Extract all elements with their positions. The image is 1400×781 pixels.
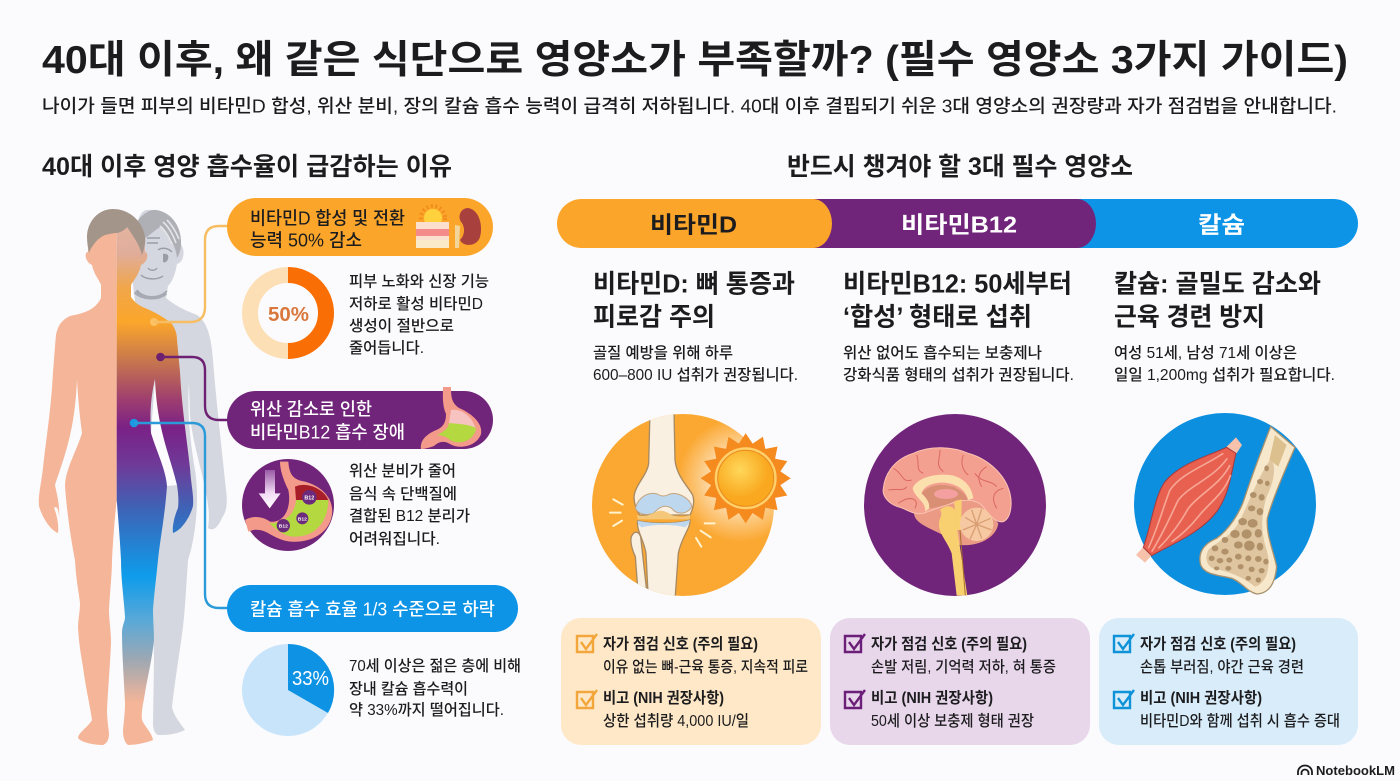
heading: 칼슘: 골밀도 감소와 [1114, 270, 1321, 298]
description: 음식 속 단백질에 [349, 485, 457, 503]
front figure right half with gradient [117, 225, 193, 745]
note text: 상한 섭취량 4,000 IU/일 [603, 712, 749, 730]
muscle [1136, 437, 1242, 563]
tab label D: 비타민D [650, 212, 737, 238]
body text: 강화식품 형태의 섭취가 권장됩니다. [843, 366, 1074, 384]
tab label calcium: 칼슘 [1198, 212, 1245, 238]
icon: stomach circle [242, 459, 334, 551]
pill: vitamin D [227, 198, 493, 256]
pie chart 33%: 33% [292, 668, 329, 690]
check text: 손발 저림, 기억력 저하, 혀 통증 [871, 658, 1056, 676]
check box panel [561, 618, 821, 745]
knee spark lines [610, 499, 715, 547]
description: 70세 이상은 젊은 층에 비해 [349, 657, 521, 675]
pill: B12 [227, 391, 493, 449]
B12 particles: B12 [298, 516, 307, 522]
note text: 50세 이상 보충제 형태 권장 [871, 712, 1034, 730]
description: 피부 노화와 신장 기능 [349, 272, 489, 290]
check text: 손톱 부러짐, 야간 근육 경련 [1140, 658, 1304, 676]
icon: check [1114, 690, 1134, 708]
icon: check [577, 690, 597, 708]
pill: calcium [227, 585, 518, 632]
icon: check [1114, 634, 1134, 652]
tab: calcium [1000, 199, 1358, 248]
donut chart 50% [250, 275, 326, 351]
panel: vitamin D cause [227, 198, 493, 357]
heading: 피로감 주의 [593, 304, 715, 332]
pie chart 33% [242, 644, 334, 736]
bone [1200, 427, 1295, 594]
front figure left half [39, 225, 117, 745]
older figure in grey [132, 210, 227, 735]
right heading: 반드시 챙겨야 할 3대 필수 영양소 [787, 153, 1133, 181]
description: 저하로 활성 비타민D [349, 295, 483, 313]
hair [87, 209, 145, 255]
connector dots [130, 318, 165, 427]
B12 particles: B12 [304, 495, 314, 501]
heading: 비타민D: 뼈 통증과 [593, 270, 795, 298]
title: 40대 이후, 왜 같은 식단으로 영양소가 부족할까? (필수 영양소 3가지 가이드) [42, 39, 1348, 82]
note title: 비고 (NIH 권장사항) [1140, 689, 1262, 707]
description: 결합된 B12 분리가 [349, 507, 470, 525]
tab: vitamin D [557, 199, 832, 248]
heading: ‘합성’ 형태로 섭취 [843, 304, 1032, 332]
panel: calcium column [1099, 270, 1358, 745]
watermark: NotebookLM: NotebookLM [1316, 764, 1395, 778]
icon: check [577, 634, 597, 652]
icon: stomach [421, 387, 481, 449]
description: 약 33%까지 떨어집니다. [349, 701, 504, 719]
icon: check [845, 634, 865, 652]
check box panel [1099, 618, 1358, 745]
illustration: muscle and bone [1134, 413, 1316, 595]
heading: 비타민B12: 50세부터 [843, 270, 1072, 298]
pill text: 비타민D 합성 및 전환 [250, 208, 405, 228]
icon: sun [700, 433, 791, 524]
pill text: 비타민B12 흡수 장애 [250, 422, 405, 442]
icon: check [845, 690, 865, 708]
left heading: 40대 이후 영양 흡수율이 급감하는 이유 [42, 153, 452, 181]
illustration: brain [864, 414, 1046, 596]
check text: 이유 없는 뼈-근육 통증, 지속적 피로 [603, 658, 808, 676]
description: 어려워집니다. [349, 530, 440, 548]
check box panel [830, 618, 1090, 745]
down arrow [259, 470, 281, 508]
body text: 골질 예방을 위해 하루 [593, 344, 733, 362]
connector lines [134, 226, 228, 608]
pill text: 능력 50% 감소 [250, 230, 362, 250]
body figure [39, 209, 227, 745]
donut chart 50%: 50% [268, 304, 309, 326]
note title: 비고 (NIH 권장사항) [603, 689, 724, 707]
panel: vitamin D column [561, 270, 821, 745]
check title: 자가 점검 신호 (주의 필요) [871, 635, 1027, 653]
stomach wall [245, 462, 332, 542]
description: 생성이 절반으로 [349, 317, 454, 335]
B12 particles [277, 490, 317, 532]
check title: 자가 점검 신호 (주의 필요) [603, 635, 758, 653]
body text: 일일 1,200mg 섭취가 필요합니다. [1114, 366, 1335, 384]
check title: 자가 점검 신호 (주의 필요) [1140, 635, 1296, 653]
gap between torso and arm [151, 379, 177, 486]
description: 장내 칼슘 흡수력이 [349, 680, 468, 698]
note text: 비타민D와 함께 섭취 시 흡수 증대 [1140, 712, 1340, 730]
tab: vitamin B12 [800, 199, 1096, 248]
pill text: 칼슘 흡수 효율 1/3 수준으로 하락 [250, 600, 495, 620]
pill text: 위산 감소로 인한 [250, 400, 372, 420]
description: 위산 분비가 줄어 [349, 462, 456, 480]
B12 particles: B12 [279, 524, 288, 530]
icon: sun and skin [416, 206, 449, 248]
body text: 600–800 IU 섭취가 권장됩니다. [593, 366, 798, 384]
illustration: knee and sun [592, 410, 802, 600]
subtitle: 나이가 들면 피부의 비타민D 합성, 위산 분비, 장의 칼슘 흡수 능력이 급격히 저하됩니다. 40대 이후 결핍되기 쉬운 3대 영양소의 권장량과 자가 점검법을 안내합니다. [42, 96, 1337, 116]
tab bar [557, 199, 1358, 248]
body text: 위산 없어도 흡수되는 보충제나 [843, 344, 1042, 362]
panel: vitamin B12 column [830, 270, 1090, 745]
panel: vitamin B12 cause [227, 387, 493, 551]
description: 줄어듭니다. [349, 339, 424, 357]
panel: calcium cause [227, 585, 521, 736]
note title: 비고 (NIH 권장사항) [871, 689, 993, 707]
tab label B12: 비타민B12 [901, 212, 1017, 238]
icon: kidney [455, 208, 481, 248]
body text: 여성 51세, 남성 71세 이상은 [1114, 344, 1297, 362]
heading: 근육 경련 방지 [1114, 304, 1265, 332]
